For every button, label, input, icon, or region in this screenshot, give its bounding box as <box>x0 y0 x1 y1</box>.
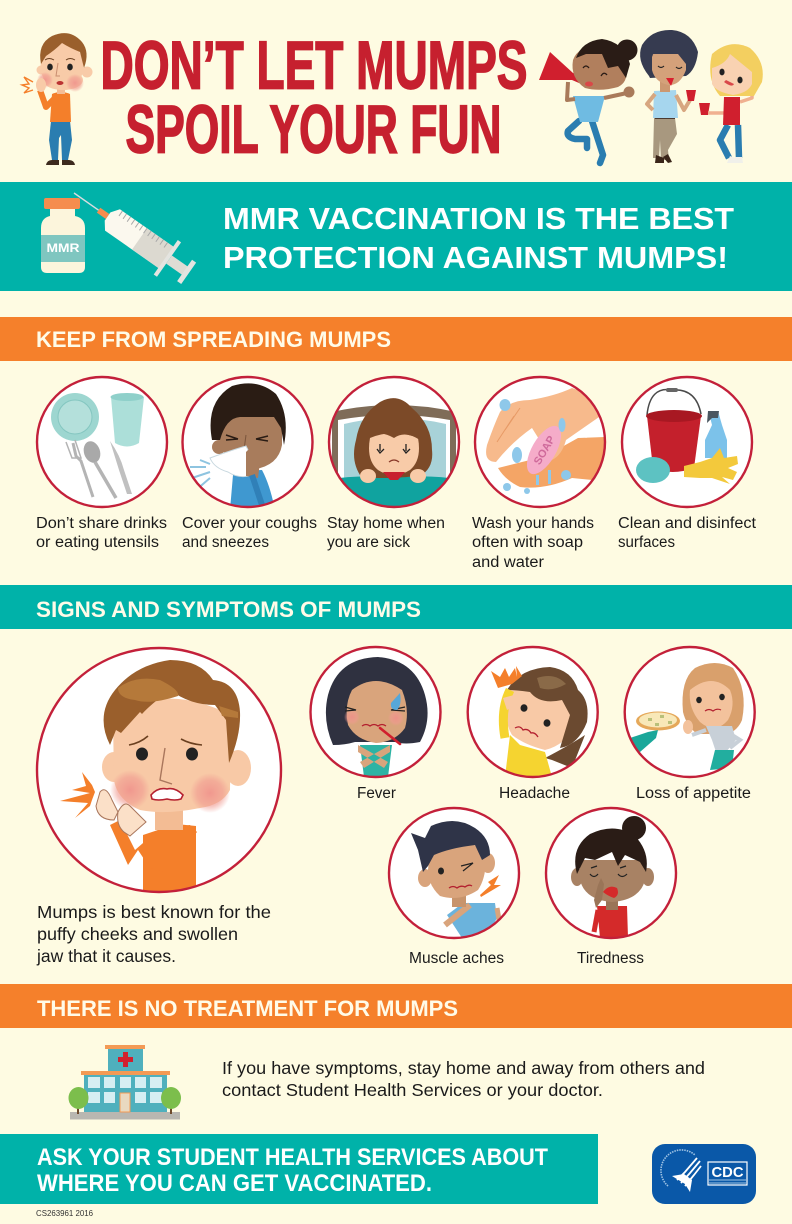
title: SPOIL YOUR FUN <box>126 92 502 168</box>
text: stay home advice <box>222 1058 705 1100</box>
section heading: signs and symptoms: SIGNS AND SYMPTOMS OF MUMPS <box>36 597 421 622</box>
callout: ask your student health services <box>0 1134 598 1204</box>
caption: Stay home when <box>327 515 445 532</box>
title <box>100 28 528 168</box>
blonde girl with cup <box>699 44 763 163</box>
text: stay home advice: If you have symptoms, stay home and away from others and <box>222 1058 705 1078</box>
text: mumps description <box>36 902 271 966</box>
panel: tiredness <box>546 808 676 938</box>
panel: fever <box>310 647 440 777</box>
hands <box>96 790 118 820</box>
boy with cup <box>640 30 698 163</box>
illustration: three friends with megaphone and cups <box>539 30 763 163</box>
banner text <box>223 201 734 275</box>
panel: clean and disinfect <box>622 377 752 507</box>
label: fever: Fever <box>357 785 396 802</box>
icon: megaphone <box>539 52 580 83</box>
section heading: keep from spreading mumps <box>0 317 792 361</box>
label: tiredness: Tiredness <box>577 950 644 967</box>
icon: hospital <box>68 1045 181 1120</box>
text: mumps description: jaw that it causes. <box>36 946 176 966</box>
label: muscle aches: Muscle aches <box>409 950 504 967</box>
panel: mumps swollen jaw illustration <box>37 648 281 892</box>
caption: or eating utensils <box>36 534 159 551</box>
eyes, brows, nose, mouth <box>136 748 148 760</box>
caption <box>618 515 757 551</box>
caption: Clean and disinfect <box>618 515 757 532</box>
caption: Wash your hands <box>472 515 594 532</box>
section heading: keep from spreading mumps: KEEP FROM SPREADING MUMPS <box>36 327 391 352</box>
panel: stay home when sick <box>326 377 462 512</box>
hair <box>104 660 240 763</box>
section heading: no treatment <box>0 984 792 1028</box>
caption: often with soap <box>472 534 583 551</box>
caption: Don’t share drinks <box>36 515 167 532</box>
panel: cover coughs and sneezes <box>182 377 312 510</box>
icon: syringe <box>62 176 201 291</box>
caption <box>182 515 317 551</box>
callout: ask your student health services: WHERE YOU CAN GET VACCINATED. <box>37 1170 432 1197</box>
icon: MMR vial <box>41 198 85 273</box>
panel: muscle aches <box>389 808 519 938</box>
footer: publication code: CS263961 2016 <box>36 1209 94 1218</box>
girl with megaphone <box>567 39 638 163</box>
caption: and water <box>472 554 544 571</box>
callout: ask your student health services: ASK YOUR STUDENT HEALTH SERVICES ABOUT <box>37 1144 548 1171</box>
shirt <box>143 824 196 892</box>
pain spark <box>60 772 95 818</box>
banner text: PROTECTION AGAINST MUMPS! <box>223 240 728 275</box>
banner: MMR vaccination <box>0 176 792 291</box>
caption: and sneezes <box>182 534 269 551</box>
panel: headache <box>468 647 598 777</box>
panel: wash hands <box>475 377 612 507</box>
caption: surfaces <box>618 534 675 551</box>
ears <box>102 752 114 782</box>
logo: CDC <box>652 1144 756 1204</box>
icon: MMR vial: MMR <box>46 243 80 255</box>
illustration: boy with mumps <box>22 33 92 165</box>
caption <box>472 515 594 571</box>
section heading: no treatment: THERE IS NO TREATMENT FOR MUMPS <box>37 996 458 1021</box>
logo: CDC: CDC <box>712 1164 744 1181</box>
caption: Cover your coughs <box>182 515 317 532</box>
caption <box>327 515 445 551</box>
label: loss of appetite: Loss of appetite <box>636 785 751 802</box>
caption: you are sick <box>327 534 410 551</box>
title: DON’T LET MUMPS <box>100 28 528 104</box>
section heading: signs and symptoms <box>0 585 792 629</box>
face <box>113 699 231 812</box>
panel: wash hands: SOAP <box>532 434 558 467</box>
text: stay home advice: contact Student Health Services or your doctor. <box>222 1080 603 1100</box>
label: headache: Headache <box>499 785 570 802</box>
banner text: MMR VACCINATION IS THE BEST <box>223 201 734 236</box>
panel: do not share drinks or utensils <box>37 377 167 507</box>
text: mumps description: Mumps is best known for the <box>37 902 271 922</box>
text: mumps description: puffy cheeks and swollen <box>37 924 238 944</box>
caption <box>36 515 167 551</box>
panel: loss of appetite <box>622 647 755 777</box>
